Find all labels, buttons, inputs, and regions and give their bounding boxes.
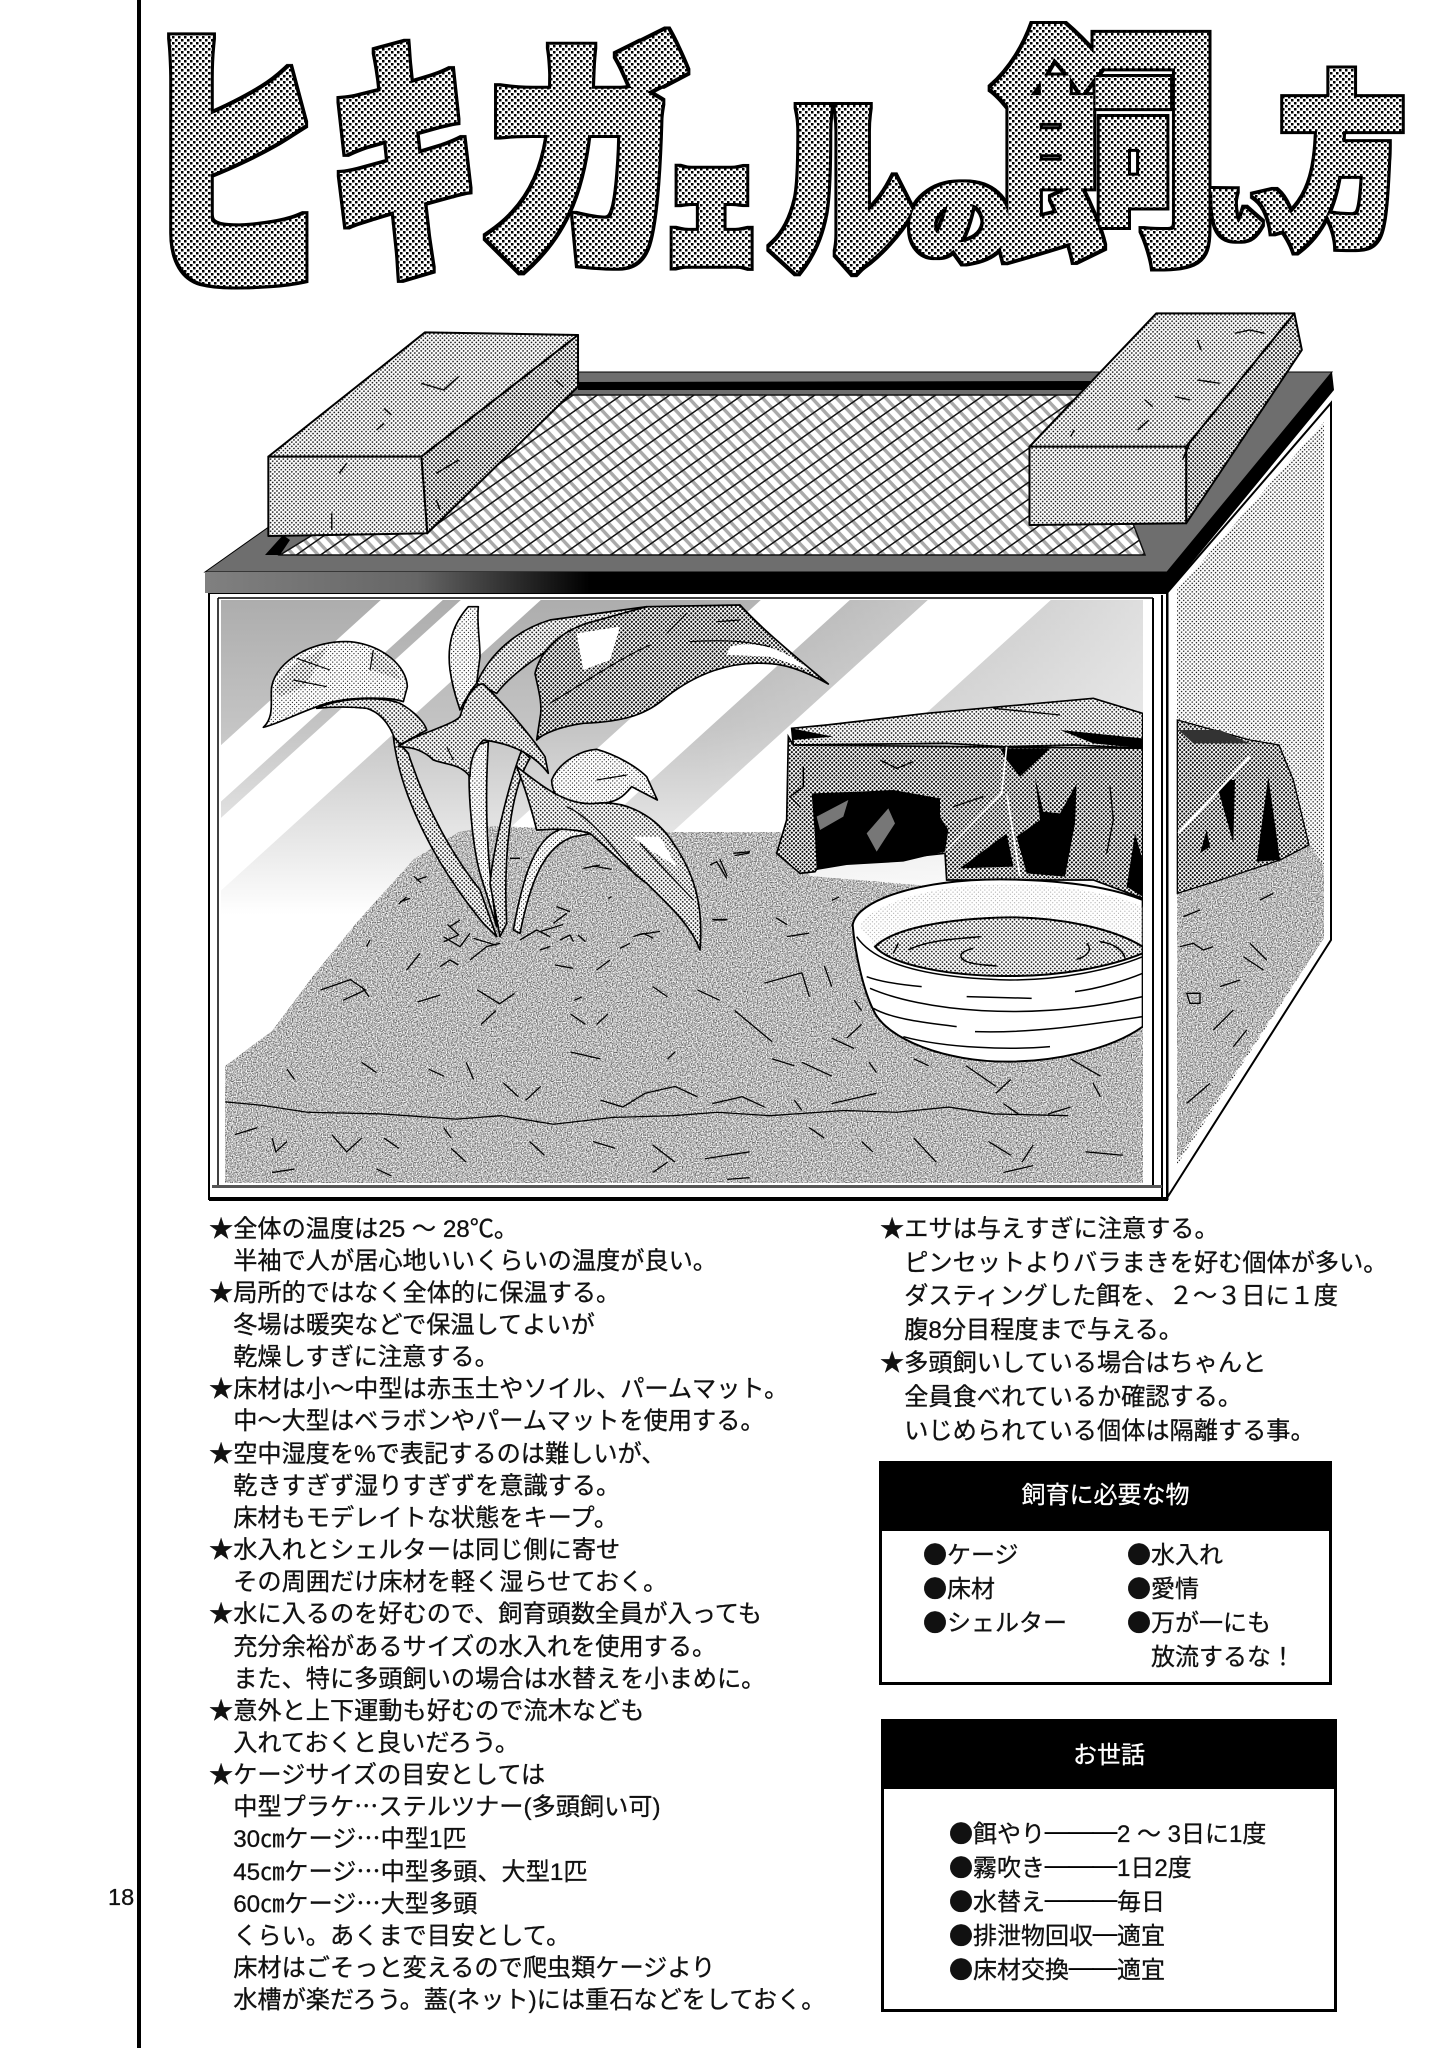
light reflection bands [221,600,1050,888]
schedule list: ●床材交換──適宜 [949,1950,1165,1985]
side glass panel [1167,403,1331,1198]
front glass background [221,600,1143,1183]
lid frame [205,372,1332,572]
right feeding notes text block: ★エサは与えすぎに注意する。 ピンセットよりバラまきを好む個体が多い。 ダスティングした餌を、２～３日に１度 腹8分目程度まで与える。 ★多頭飼いしている場合はちゃんと 全員食べれているか確認する。 いじめられている個体は隔離する事。 [880,1216,1387,1445]
item list left: ●水入れ [1127,1535,1223,1570]
mesh net [280,395,1145,555]
title: の [909,149,1011,280]
title: 方 [1281,20,1404,281]
schedule list: ●水替え───毎日 [949,1882,1165,1917]
schedule list [949,1814,1266,1985]
item list left: ●愛情 [1127,1569,1199,1604]
page number: 18 [108,1884,134,1910]
lid with mesh [205,372,1334,593]
rock seen through side glass [1177,720,1309,1103]
item list left: ●床材 [923,1569,995,1604]
glass frame [209,593,1168,1201]
panel heading: お世話 [1073,1742,1145,1769]
schedule list: ●餌やり───2 ～ 3日に1度 [949,1814,1266,1849]
page edge rule [137,0,140,2048]
panel: daily care schedule [881,1719,1337,2012]
soil seen through side glass [1177,845,1324,1157]
item list left: ●万が一にも [1127,1603,1271,1638]
title: ェ [664,89,759,295]
title [142,0,1404,352]
panel heading: 飼育に必要な物 [1022,1482,1190,1509]
soil texture marks [225,853,1123,1179]
item list left [923,1535,1295,1671]
left brick weight [268,332,578,536]
plant [263,605,828,970]
schedule list: ●霧吹き───1日2度 [949,1848,1192,1883]
schedule list: ●排泄物回収─適宜 [949,1916,1165,1951]
right brick weight [1029,313,1302,525]
water bowl [853,879,1143,1062]
panel: things needed for keeping [879,1461,1332,1685]
shelter entrance [812,790,948,870]
left care notes text block: ★全体の温度は25 ～ 28℃。 半袖で人が居心地いいくらいの温度が良い。 ★局所的ではなく全体的に保温する。 冬場は暖突などで保温してよいが 乾燥しすぎに注意する。 ★床材は小～中型は赤玉土やソイル、パームマット。 中～大型はベラボンやパームマットを使用する。 ★空中湿度を%で表記するのは難しいが、 乾きすぎず湿りすぎずを意識する。 床材もモデレイトな状態をキープ。 ★水入れとシェルターは同じ側に寄せ その周囲だけ床材を軽く湿らせておく。 ★水に入るのを好むので、飼育頭数全員が入っても 充分余裕があるサイズの水入れを使用する。 また、特に多頭飼いの場合は水替えを小まめに。 ★意外と上下運動も好むので流木なども 入れておくと良いだろう。 ★ケージサイズの目安としては 中型プラケ…ステルツナー(多頭飼い可) 30㎝ケージ…中型1匹 45㎝ケージ…中型多頭、大型1匹 60㎝ケージ…大型多頭 くらい。あくまで目安として。 床材はごそっと変えるので爬虫類ケージより 水槽が楽だろう。蓋(ネット)には重石などをしておく。 [209,1216,825,2014]
item list left: ●ケージ [923,1535,1019,1570]
terrarium illustration [204,312,1334,1202]
illustration and title artwork [142,0,1405,1202]
panel heading [883,1721,1335,1789]
shelter rock [777,698,1143,898]
soil substrate [225,826,1143,1183]
item list left: ●シェルター [923,1603,1067,1638]
title: ル [773,39,910,311]
item list left: 放流するな！ [1151,1644,1295,1671]
lid front edge [205,572,1167,593]
title: い [1208,167,1293,254]
panel heading [881,1463,1330,1531]
